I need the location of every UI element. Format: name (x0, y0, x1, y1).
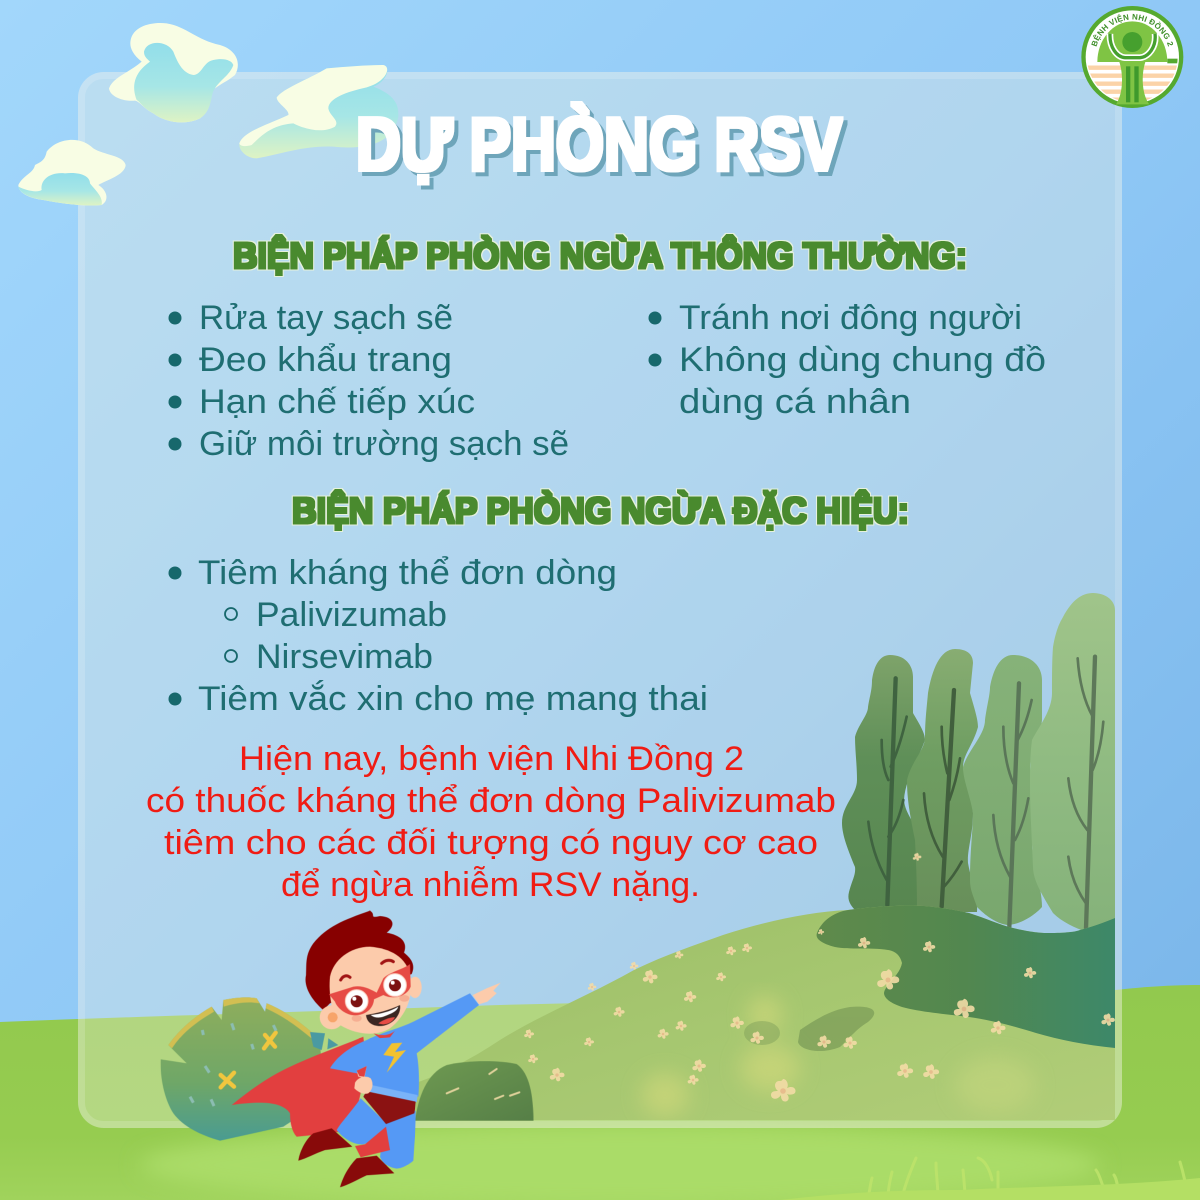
list: specific measures: Tiêm kháng thể đơn dòng (198, 554, 617, 592)
cape (232, 1037, 367, 1137)
cloud: right of panel corner (239, 65, 398, 158)
list: general measures left column: Giữ môi trường sạch sẽ (199, 425, 569, 463)
boot: front (340, 1156, 394, 1187)
face (330, 947, 411, 1034)
sock (355, 1127, 390, 1157)
hair (305, 911, 413, 1010)
hill shadow patch (817, 906, 1115, 1048)
list: general measures left column (168, 299, 569, 463)
tree 1 (842, 655, 925, 912)
list: general measures left column: Rửa tay sạch sẽ (199, 299, 453, 337)
cloud: lower left (18, 140, 126, 205)
green ground (0, 985, 1200, 1200)
list: general measures left column: Hạn chế tiếp xúc (199, 383, 475, 421)
ear: right (408, 977, 422, 998)
title: DỰ PHÒNG RSV (356, 102, 842, 186)
heading: specific prevention: BIỆN PHÁP PHÒNG NGỪA ĐẶC HIỆU: (292, 489, 909, 531)
cape knot and hand (354, 1066, 373, 1094)
translucent glass panel (78, 72, 1122, 1128)
shorts (363, 1092, 416, 1124)
eyebrows (341, 960, 393, 980)
callout: hospital note in red (146, 740, 836, 904)
hill shadow spots (744, 1007, 874, 1051)
hospital logo (1081, 6, 1184, 108)
heading: general prevention: BIỆN PHÁP PHÒNG NGỪA THÔNG THƯỜNG: (233, 234, 967, 276)
panel rim (82, 76, 1118, 1124)
callout: hospital note in red: có thuốc kháng thể đơn dòng Palivizumab (146, 782, 836, 820)
cloud group (18, 23, 398, 205)
logo: inner emblem (1087, 21, 1181, 100)
callout: hospital note in red: để ngừa nhiễm RSV nặng. (281, 866, 700, 904)
ear: left (320, 1005, 344, 1029)
cloud: top centre (109, 23, 238, 122)
grass foreground strip (780, 1178, 1200, 1200)
eyes (345, 974, 406, 1012)
belt (368, 1085, 418, 1102)
mouth (366, 1005, 400, 1026)
list: specific measures: Nirsevimab (256, 638, 433, 676)
bush: small dark shrub (415, 1061, 533, 1121)
landscape: trees and hill (410, 593, 1115, 1120)
red mask glasses (329, 964, 411, 1015)
list: specific measures (168, 554, 708, 718)
cheeks (352, 995, 409, 1022)
callout: hospital note in red: tiêm cho các đối tượng có nguy cơ cao (164, 824, 818, 862)
torso and arm (330, 993, 479, 1097)
list: general measures right column: Tránh nơi đông người (679, 299, 1022, 337)
list: specific measures: Palivizumab (256, 596, 447, 634)
hill light patches (641, 995, 1035, 1117)
pointing hand (473, 983, 501, 1004)
bush flecks (447, 1069, 519, 1099)
ear inner (328, 1012, 338, 1022)
hill (410, 906, 1115, 1120)
list: general measures right column: Không dùng chung đồ (679, 341, 1046, 379)
tree 2 (907, 649, 978, 912)
grass tufts (868, 1158, 1188, 1198)
bush: round leaf (161, 997, 323, 1141)
list: general measures left column: Đeo khẩu trang (199, 341, 452, 379)
leg: right (380, 1111, 416, 1169)
list: general measures right column: dùng cá nhân (679, 383, 911, 421)
flowers (524, 853, 1115, 1102)
callout: hospital note in red: Hiện nay, bệnh viện Nhi Đồng 2 (239, 740, 744, 778)
boot: back (298, 1128, 352, 1161)
front lawn band (140, 1123, 1100, 1200)
tree 4 (1030, 593, 1115, 932)
superhero boy with bushes (161, 911, 533, 1187)
list: general measures right column (648, 299, 1046, 421)
neck (373, 1031, 395, 1038)
collar accent (310, 1032, 338, 1050)
list: specific measures: Tiêm vắc xin cho mẹ mang thai (198, 680, 708, 718)
logo: figure (1110, 32, 1155, 104)
hospital logo: BỆNH VIỆN NHI ĐỒNG 2 (1091, 14, 1173, 46)
lightning emblem (383, 1043, 406, 1073)
leg: left thigh (337, 1098, 387, 1144)
logo: circular name (1096, 20, 1168, 47)
tree 3 (963, 655, 1042, 927)
